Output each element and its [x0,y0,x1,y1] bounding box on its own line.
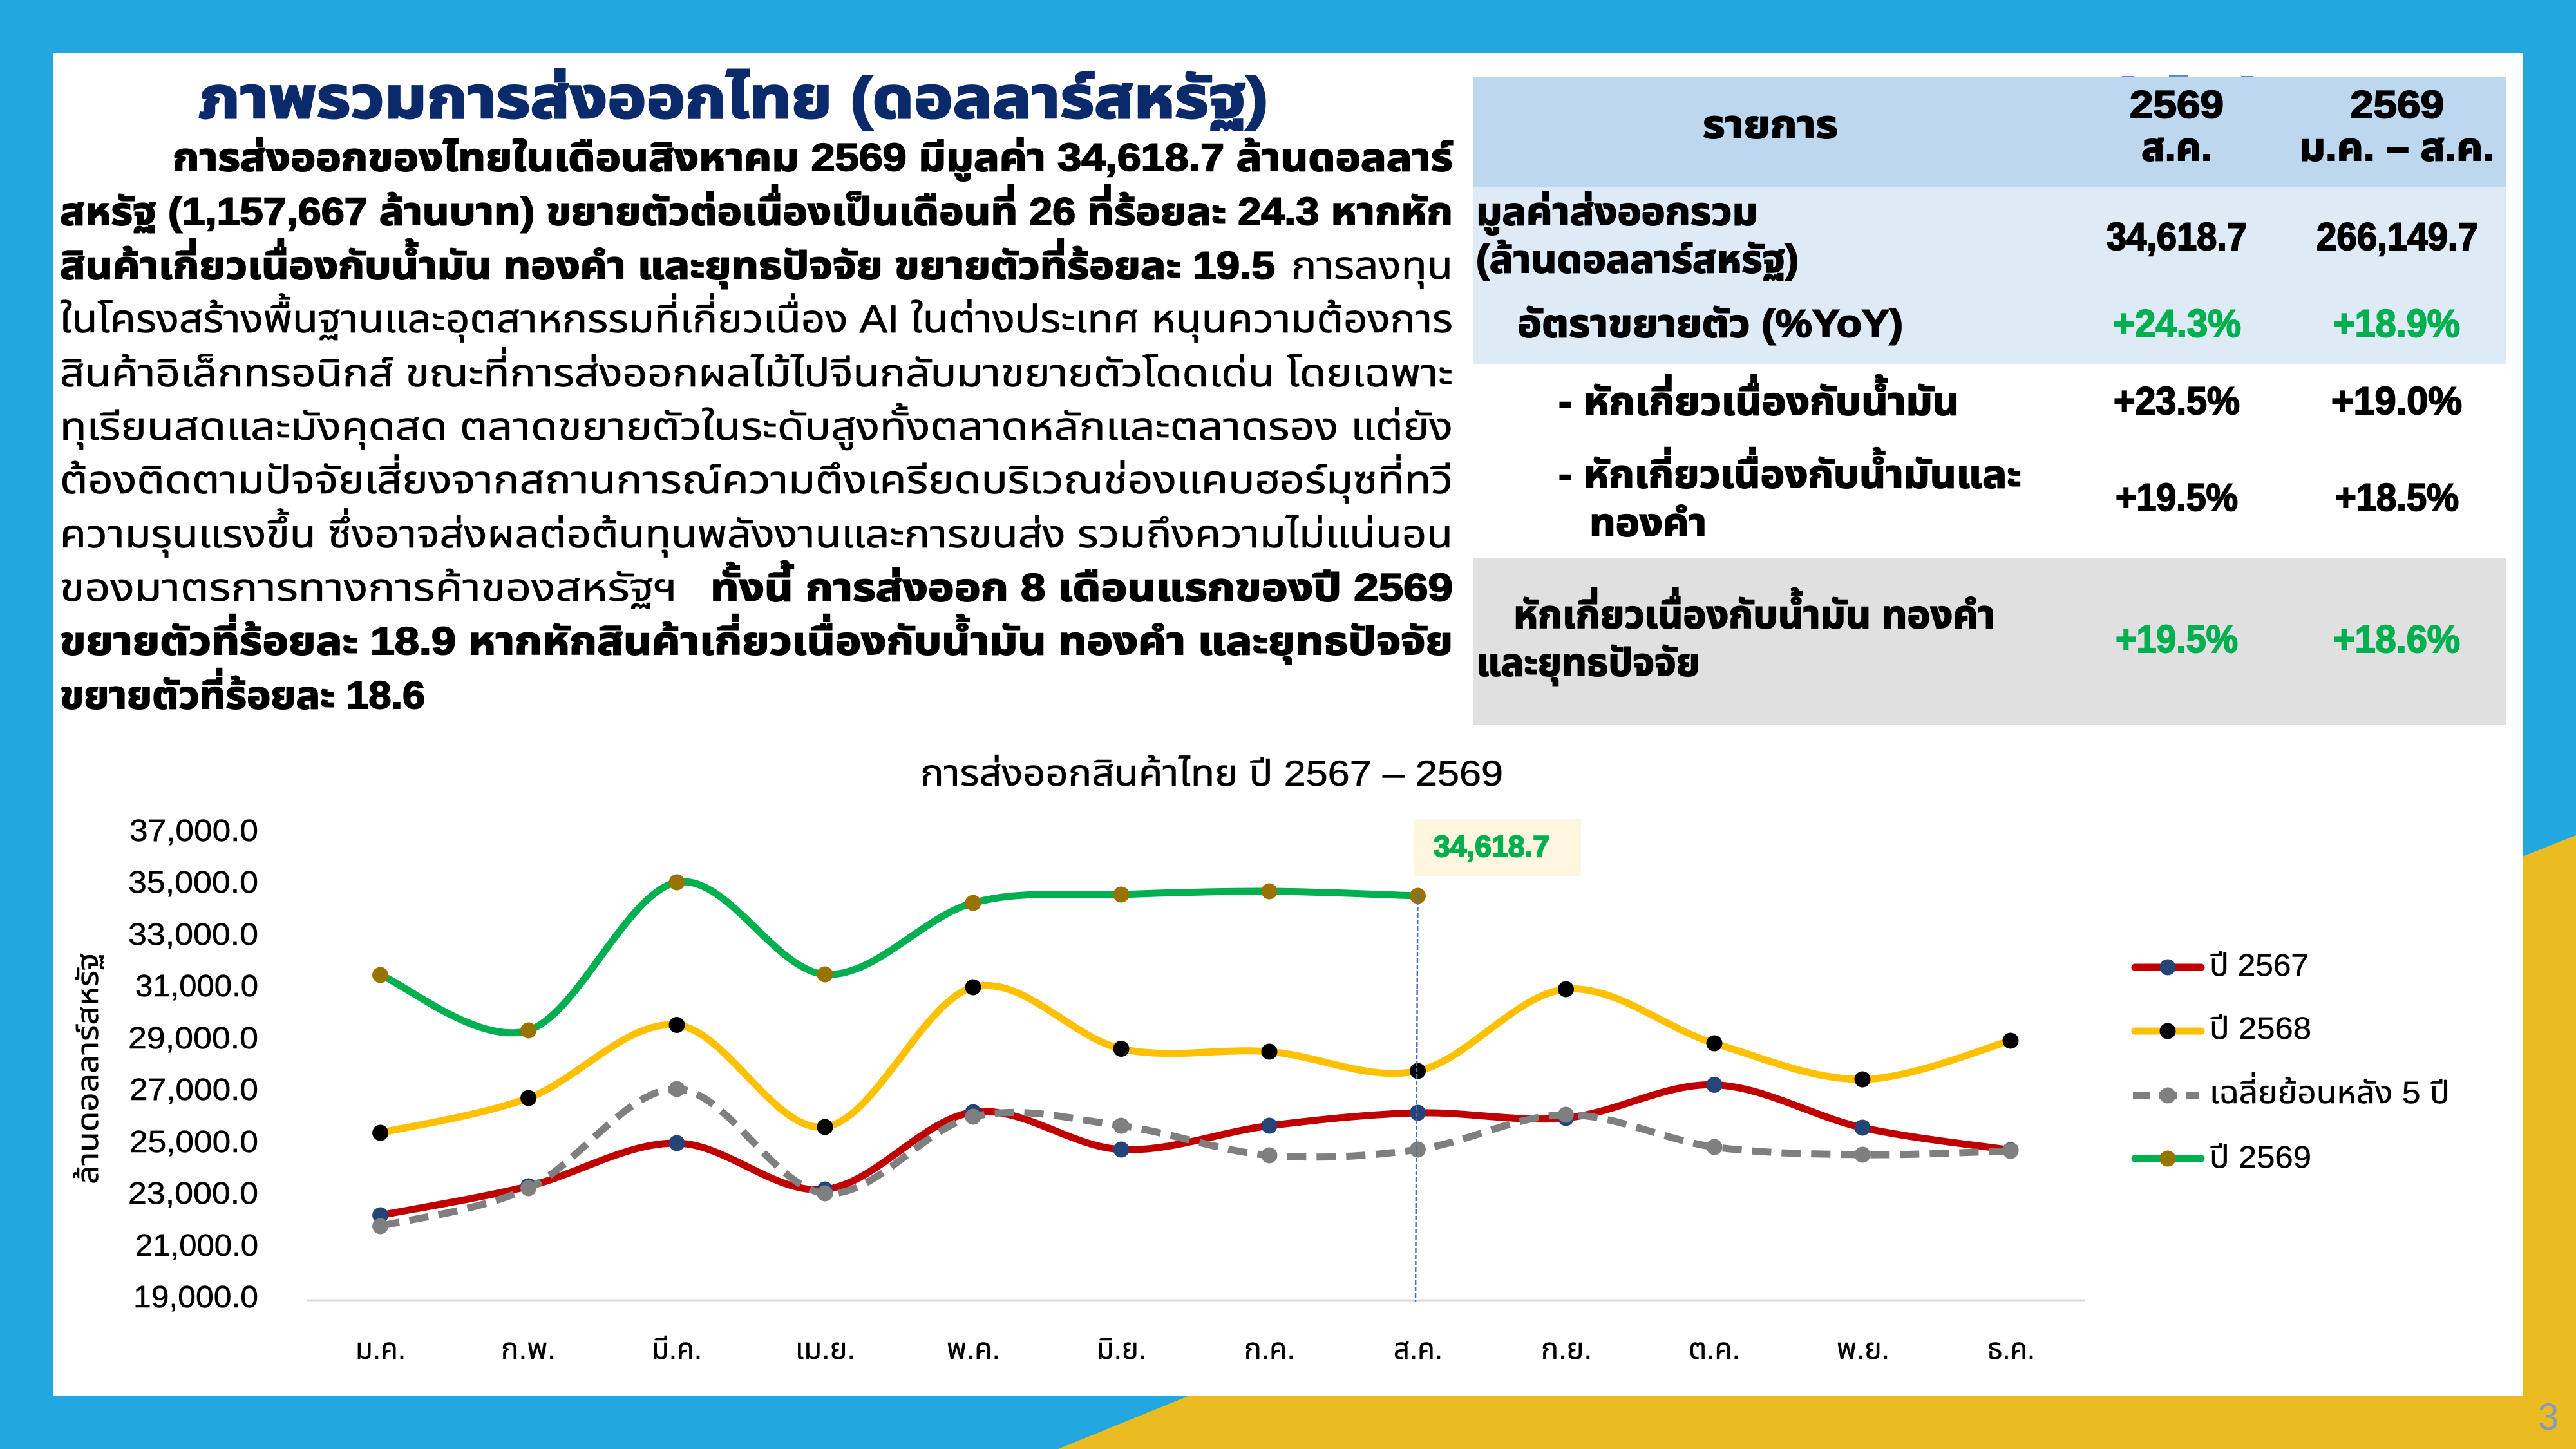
table row: excluding oil and gold: ทองคำ [1589,501,1707,544]
x axis month labels: ก.พ. [501,1332,556,1365]
y axis labels: 29,000.0 [128,1021,258,1056]
x axis month labels: ธ.ค. [1987,1332,2035,1365]
text block: summary paragraph: ขยายตัวที่ร้อยละ 18.9 หากหักสินค้าเกี่ยวเนื่องกับน้ำมัน ทองคำ และยุทธปัจจัย [60,614,1453,665]
table row: growth rate: +24.3% [2113,302,2241,345]
y axis labels: 21,000.0 [135,1229,258,1263]
table header row: รายการ [1703,103,1838,146]
table row: total export value [1473,187,2506,290]
table header row [1473,77,2506,187]
table row: growth rate [1473,290,2506,364]
table row: excluding oil, gold and arms: หักเกี่ยวเนื่องกับน้ำมัน ทองคำ [1513,587,1995,636]
text block: summary paragraph: สินค้าอิเล็กทรอนิกส์ ขณะที่การส่งออกผลไม้ไปจีนกลับมาขยายตัวโดดเด่น โดยเฉพาะ [60,347,1453,395]
text block: summary paragraph: ทุเรียนสดและมังคุดสด ตลาดขยายตัวในระดับสูงทั้งตลาดหลักและตลาดรอง แต่ยัง [60,402,1453,450]
y axis labels: 19,000.0 [133,1280,258,1314]
y axis labels: 27,000.0 [129,1073,258,1107]
series: 5-year average gray dashed line [372,1081,2018,1234]
table row: excluding oil: +19.0% [2331,379,2462,422]
table row: growth rate: อัตราขยายตัว (%YoY) [1517,302,1903,345]
callout: August 2569 value [1414,819,1581,876]
x axis month labels: พ.ค. [947,1332,1000,1365]
table row: excluding oil, gold and arms: และยุทธปัจจัย [1476,641,1700,686]
table row: excluding oil, gold and arms [1473,558,2506,724]
y axis labels: 25,000.0 [129,1125,258,1159]
table row: growth rate: +18.9% [2333,302,2460,345]
table row: excluding oil and gold: - หักเกี่ยวเนื่องกับน้ำมันและ [1558,447,2022,496]
legend item: 2569 [2135,1141,2311,1175]
x axis month labels: ก.ย. [1541,1332,1592,1365]
title: ภาพรวมการส่งออกไทย (ดอลลาร์สหรัฐ) [198,66,1268,131]
text block: summary paragraph: ในโครงสร้างพื้นฐานและอุตสาหกรรมที่เกี่ยวเนื่อง AI ในต่างประเทศ หนุนความต้องการ [60,293,1453,343]
page number: 3 [2538,1396,2559,1438]
chart legend [2133,949,2450,1175]
line chart: Thai exports 2567-2569 [71,753,2450,1365]
y axis title: ล้านดอลลาร์สหรัฐ [71,952,104,1184]
table header row: ส.ค. [2141,126,2212,169]
x axis line [307,1300,2085,1301]
August marker dashed vertical line [1416,894,1418,1302]
x axis month labels: ก.ค. [1244,1332,1295,1365]
y axis labels: 33,000.0 [128,918,258,952]
x axis month labels: มิ.ย. [1097,1332,1146,1365]
text block: summary paragraph: การส่งออกของไทยในเดือนสิงหาคม 2569 มีมูลค่า 34,618.7 ล้านดอลลาร์ [173,136,1453,181]
x axis month labels [355,1332,2035,1365]
legend item: 2568: ปี 2568 [2210,1012,2311,1046]
legend item: 2567 [2135,949,2309,983]
table row: excluding oil: +23.5% [2114,379,2240,422]
text block: summary paragraph: ต้องติดตามปัจจัยเสี่ยงจากสถานการณ์ความตึงเครียดบริเวณช่องแคบฮอร์มุซที่ทวี [60,454,1453,504]
text block: summary paragraph: ทั้งนี้ การส่งออก 8 เดือนแรกของปี 2569 [710,560,1453,609]
background: yellow corner shape [1058,835,2576,1449]
y axis labels [128,814,258,1314]
x axis month labels: มี.ค. [652,1332,702,1365]
table row: excluding oil: - หักเกี่ยวเนื่องกับน้ำมัน [1558,374,1959,423]
y axis labels: 35,000.0 [128,866,258,900]
table row: excluding oil, gold and arms: +18.6% [2333,618,2460,661]
table row: excluding oil and gold: +18.5% [2335,476,2459,519]
text block: summary paragraph [60,136,1453,717]
clipped fragment above table header [2122,75,2253,77]
panel: summary table [1473,77,2506,724]
table row: excluding oil and gold: +19.5% [2116,476,2238,519]
y axis labels: 37,000.0 [129,814,258,848]
legend item: 2569: ปี 2569 [2210,1141,2311,1175]
text block: summary paragraph: ความรุนแรงขึ้น ซึ่งอาจส่งผลต่อต้นทุนพลังงานและการขนส่ง รวมถึงความไม่แน่นอน [60,508,1453,558]
table row: excluding oil, gold and arms: +19.5% [2116,618,2238,661]
table header row: ม.ค. – ส.ค. [2299,126,2494,169]
callout: August 2569 value: 34,618.7 [1434,829,1549,863]
x axis month labels: ส.ค. [1394,1332,1443,1365]
y axis labels: 31,000.0 [135,969,258,1003]
table header row: 2569 [2350,83,2444,126]
text block: summary paragraph: สหรัฐ (1,157,667 ล้านบาท) ขยายตัวต่อเนื่องเป็นเดือนที่ 26 ที่ร้อยละ 24.3 หากหัก [60,184,1453,233]
series: 2568 yellow line [372,979,2018,1141]
x axis month labels: ต.ค. [1689,1332,1740,1365]
text block: summary paragraph: การลงทุน [1291,244,1453,289]
text block: summary paragraph: สินค้าเกี่ยวเนื่องกับน้ำมัน ทองคำ และยุทธปัจจัย ขยายตัวที่ร้อยละ 19.5 [60,238,1275,289]
table row: total export value: 266,149.7 [2316,215,2478,258]
series: 2567 red line [372,1077,2018,1224]
table row: excluding oil and gold [1558,447,2459,544]
x axis month labels: เม.ย. [795,1332,855,1365]
x axis month labels: พ.ย. [1837,1332,1889,1365]
legend item: 5-year average [2133,1072,2450,1110]
legend item: 2567: ปี 2567 [2210,949,2309,983]
text block: summary paragraph: ขยายตัวที่ร้อยละ 18.6 [60,668,425,717]
table header row: 2569 [2130,83,2224,126]
x axis month labels: ม.ค. [355,1332,406,1365]
table row: excluding oil [1558,374,2462,423]
table row: total export value: (ล้านดอลลาร์สหรัฐ) [1476,238,1799,281]
table row: total export value: มูลค่าส่งออกรวม [1476,190,1758,235]
series: 2569 green line [372,875,1426,1038]
table row: total export value: 34,618.7 [2107,215,2247,258]
chart title: การส่งออกสินค้าไทย ปี 2567 – 2569 [920,753,1503,793]
legend item: 5-year average: เฉลี่ยย้อนหลัง 5 ปี [2210,1072,2450,1110]
legend item: 2568 [2135,1012,2311,1046]
y axis labels: 23,000.0 [128,1177,258,1211]
text block: summary paragraph: ของมาตรการทางการค้าของสหรัฐฯ [60,566,677,609]
